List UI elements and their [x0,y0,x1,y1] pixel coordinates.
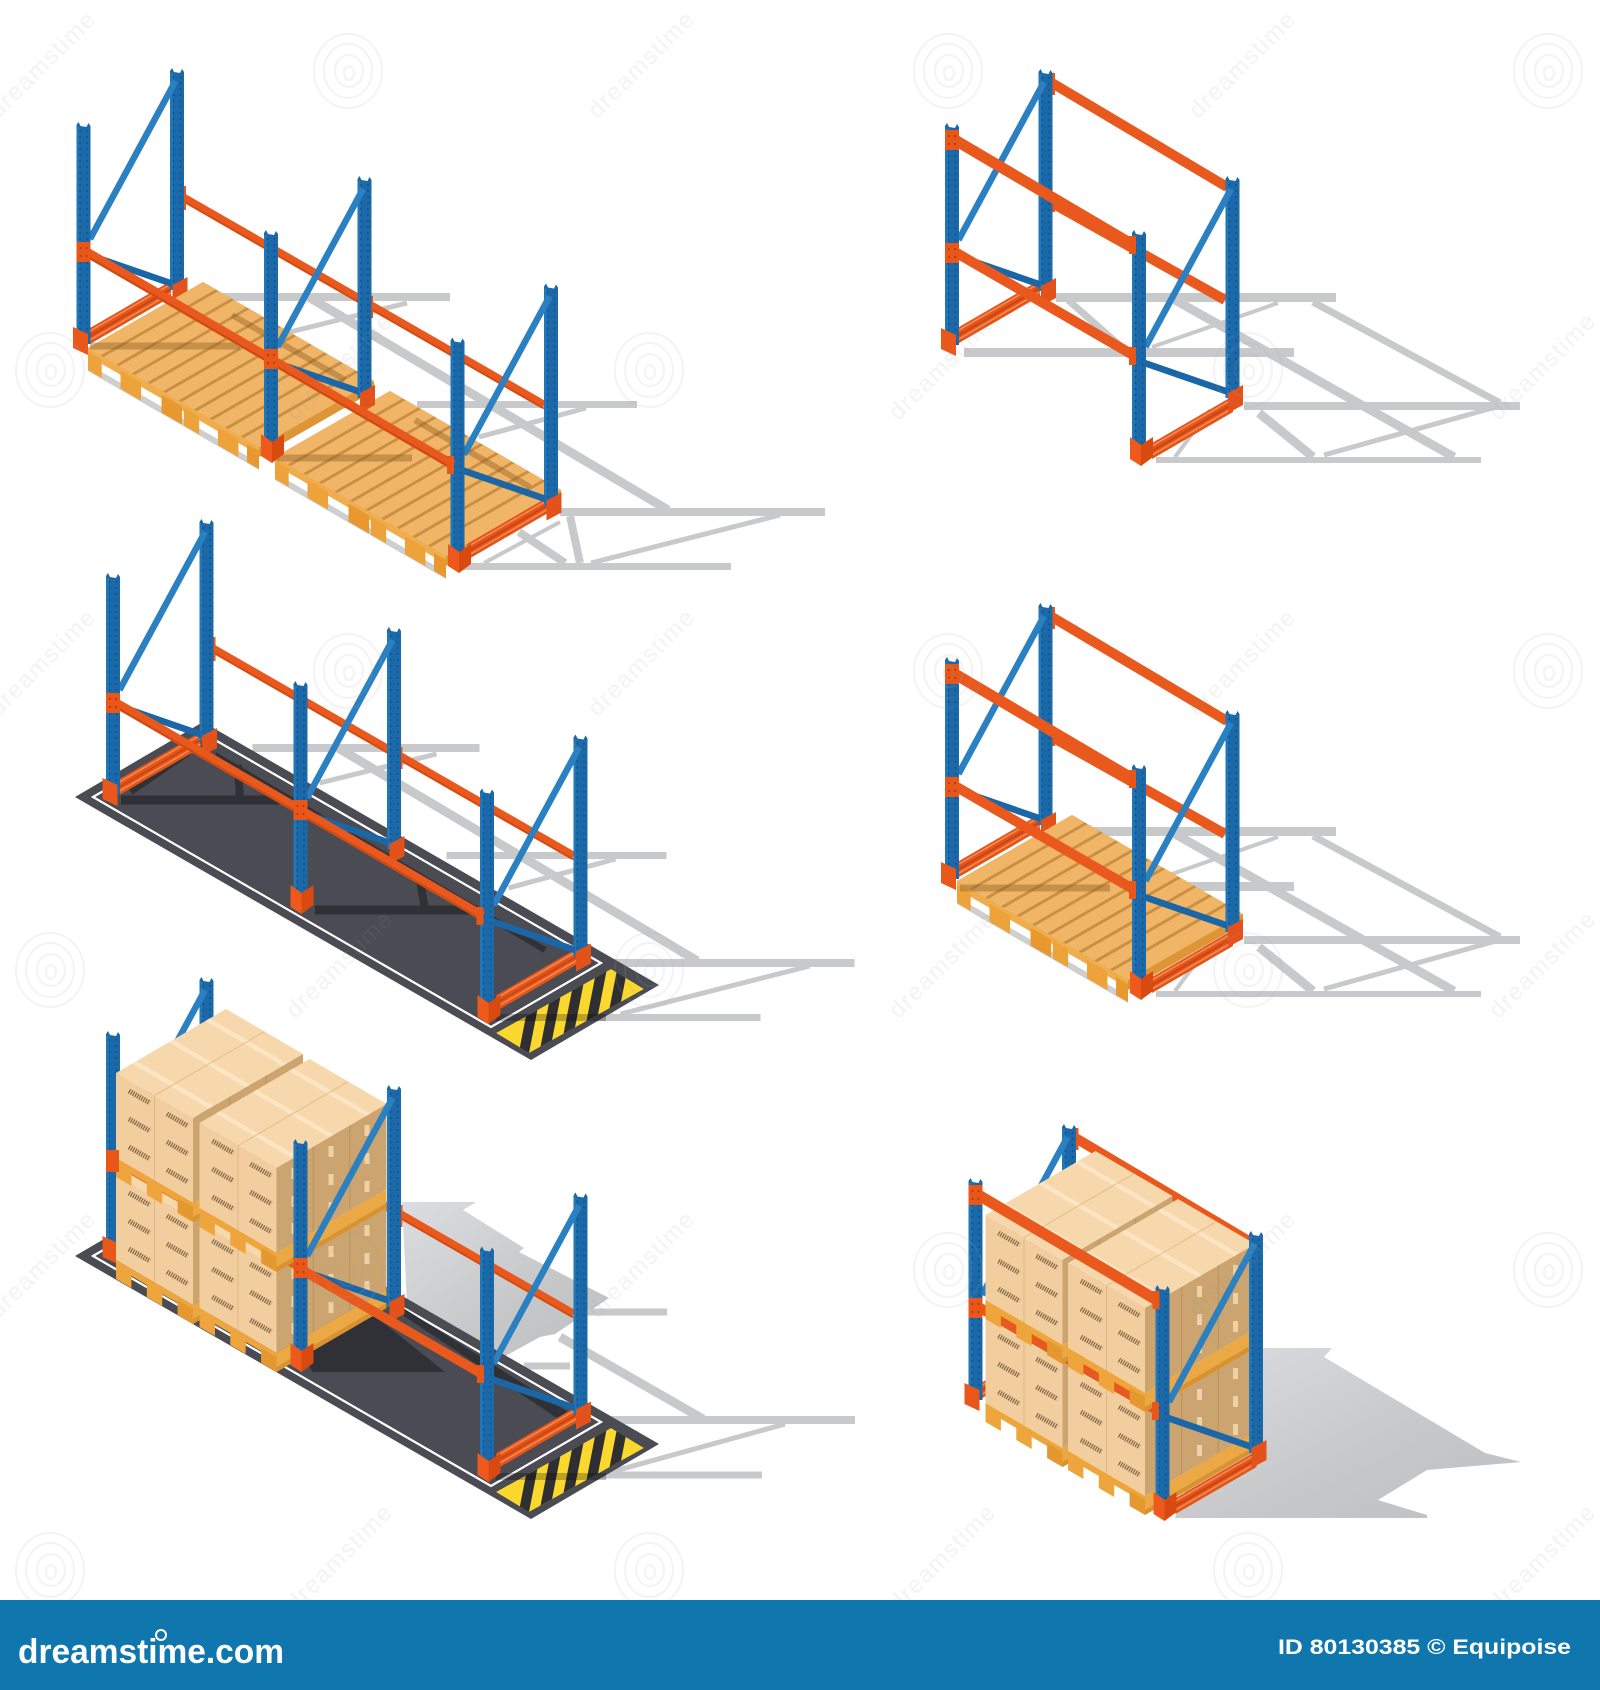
footer bar [0,1600,1600,1690]
rack: single bay with pallets [941,603,1520,1003]
watermark text: dreamstime [1484,308,1600,426]
floor mat with hazard stripes [75,722,662,1060]
shadow across hazard [496,1014,606,1021]
middle frame: rack one [261,176,375,463]
shadow: single bay [964,298,1520,460]
left frame: rack two [102,519,217,806]
shadow: rack two [252,747,854,1018]
watermark text: dreamstime [281,308,399,426]
middle frame: rack two [290,627,404,914]
floor shadows [121,753,545,950]
left frame: rack one [73,68,188,355]
right frame: rack one [448,284,562,573]
floor mat: loaded rack [75,1181,662,1519]
right frame [1154,1231,1266,1521]
left frame: loaded rack [102,977,217,1264]
right frame: rack two [478,734,591,1024]
floor shadow under load [305,1306,568,1420]
right frame: loaded rack [478,1192,591,1482]
rack: single bay loaded [964,1124,1521,1521]
brackets [294,1258,308,1278]
watermark text: dreamstime [1184,6,1302,124]
watermark text: dreamstime [583,604,701,722]
watermark text: dreamstime [1484,906,1600,1024]
rack: two bays empty on floor mat [75,519,854,1060]
watermark text: dreamstime [281,1499,399,1617]
shadow: loaded rack [402,1202,855,1475]
shadow: single bay with pallets [964,832,1520,994]
shadow across hazard, loaded rack [496,1473,606,1480]
beam behind pallets [117,1162,297,1266]
rack: single bay empty [941,69,1520,466]
top front beam [968,1185,1160,1309]
watermark text: dreamstime [1184,1206,1302,1324]
back beams: single bay [1049,73,1227,300]
front beam: rack one [76,242,454,474]
box stack: lower front [200,1159,386,1372]
back beams [1072,1128,1250,1355]
box stack: lower front [1068,1302,1255,1515]
watermark text: dreamstime [1484,1499,1600,1617]
front beam: rack two [106,693,484,925]
watermark text: dreamstime [1184,604,1302,722]
footer credit: ID 80130385 © Equipoise [1278,1636,1571,1659]
back beam: rack one [180,186,544,408]
back beam: rack two [210,637,574,860]
left frame: single bay [941,69,1056,356]
box stack: upper front [200,1059,386,1272]
footer logo: dreamstime.com [18,1633,284,1671]
rack: two bays with pallets on floor, no floor mat [73,68,825,579]
shadow: single bay loaded [1175,1348,1521,1518]
box stack: lower rear [986,1254,1172,1467]
watermark text: dreamstime [583,6,701,124]
front beams: single bay [945,130,1136,365]
left bracket [106,1150,119,1172]
box stack: upper front [1068,1199,1255,1412]
watermark text: dreamstime [884,308,1002,426]
pallet [957,815,1243,1003]
box stack: upper rear [116,1009,303,1222]
right frame [1130,710,1243,1000]
lower right bracket [1152,1402,1159,1420]
shadow band on pallet [960,884,1110,892]
box stack: lower rear [116,1111,303,1324]
watermark text: dreamstime [884,1499,1002,1617]
back beam: loaded rack [210,1095,574,1318]
left frame [941,603,1056,890]
watermark text: dreamstime [884,906,1002,1024]
front beams [945,664,1136,899]
shadow bands on pallets [90,315,530,487]
pallet: second bay [275,391,561,579]
back beams [1049,607,1227,834]
shadow: rack one [223,296,825,566]
watermark text: dreamstime [583,1206,701,1324]
rack: two bays, first bay loaded with boxes [75,977,855,1519]
right bracket [477,1365,484,1383]
right frame: single bay [1130,176,1243,466]
front beam: right part [297,1267,482,1374]
lower beam [968,1298,1160,1420]
middle frame: loaded rack [290,1085,404,1372]
pallet: first bay [88,282,374,470]
watermark text: dreamstime [281,906,399,1024]
left frame [964,1124,1080,1411]
box stack: upper rear [986,1151,1172,1364]
